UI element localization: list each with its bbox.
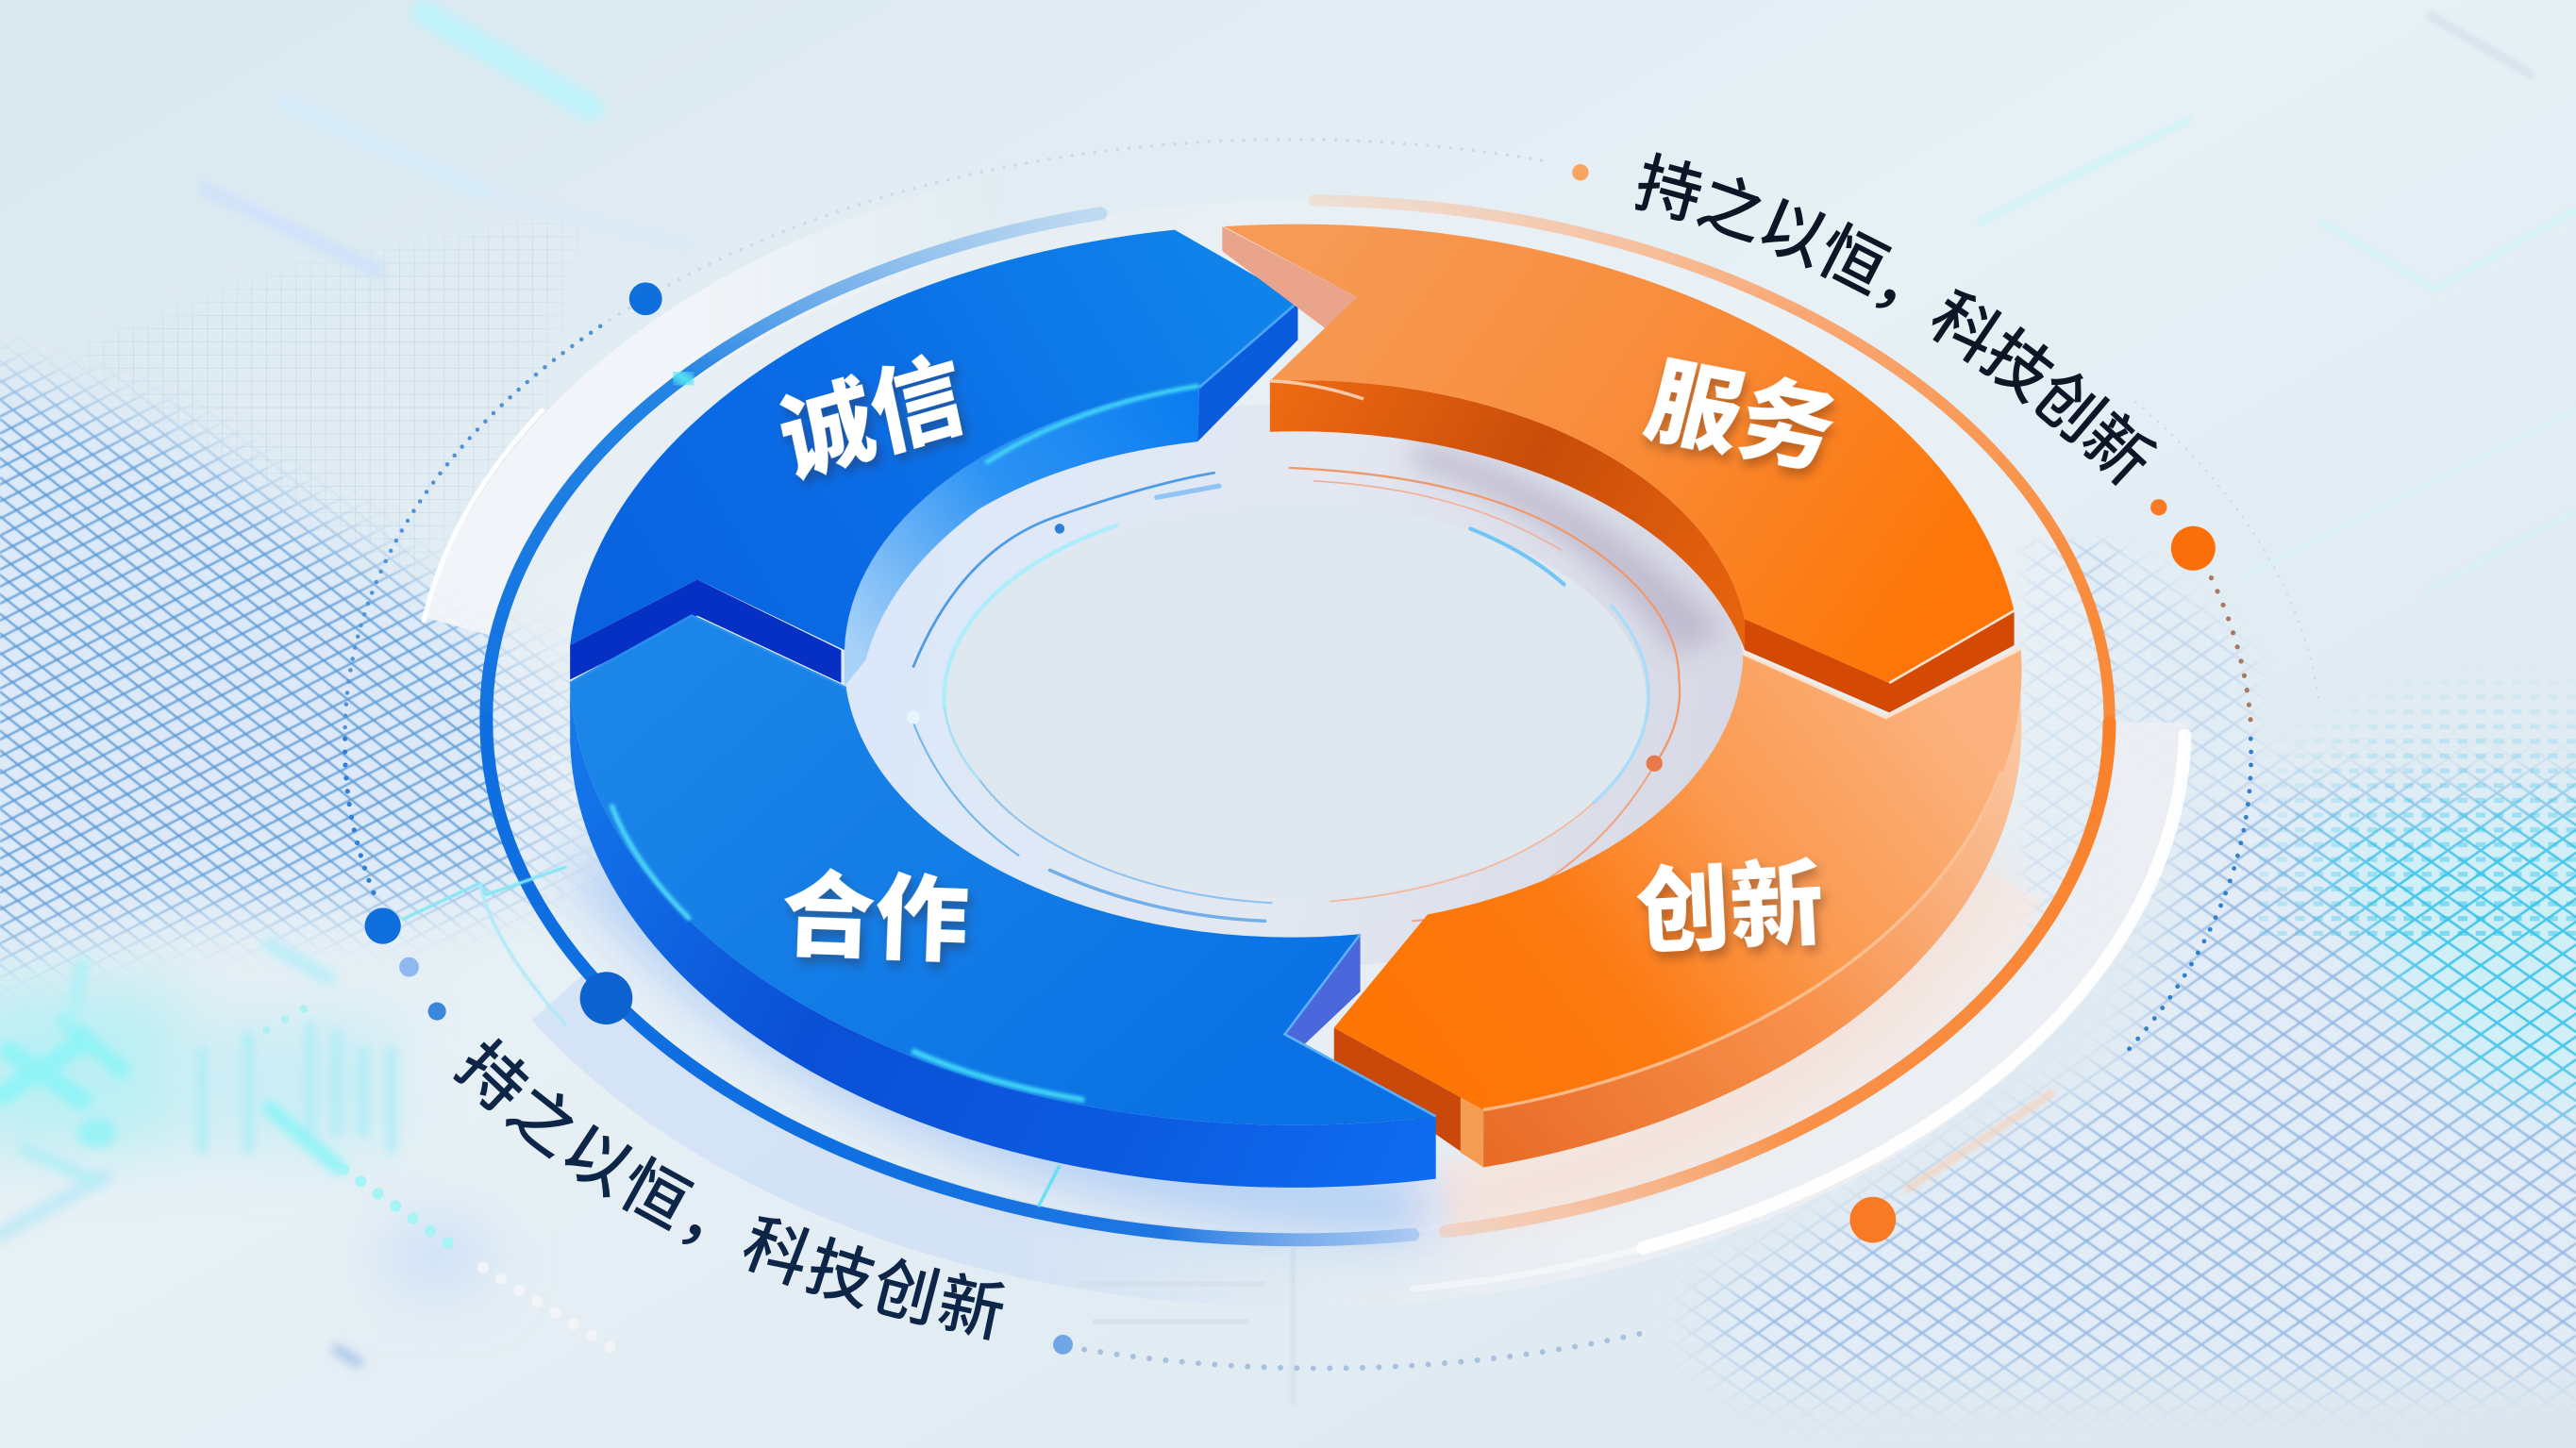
accent dots: orange — [1572, 164, 2216, 1242]
dotted tail — [248, 1005, 614, 1350]
outer dotted orbit — [345, 140, 2319, 1368]
accent dots: blue — [365, 282, 1073, 1355]
tagline: upper right: 持之以恒，科技创新 — [1634, 152, 2157, 487]
label: 服务: 服务 — [1636, 349, 1846, 486]
segment: 创新 — [1334, 648, 2021, 1167]
inner well floor — [840, 404, 1747, 969]
label: 创新: 创新 — [1633, 852, 1826, 966]
inner dots — [907, 524, 1663, 772]
segment: 服务 — [1222, 225, 2015, 712]
well shadow — [1413, 440, 1725, 657]
segment: 诚信 — [570, 230, 1297, 686]
orange outer ring — [1314, 200, 2110, 1231]
blue outer ring — [486, 213, 1413, 1240]
label: 合作: 合作 — [779, 863, 971, 974]
inner ring wash — [486, 200, 2110, 1238]
glass band — [424, 208, 2185, 1322]
cyan accent lines — [403, 867, 1060, 1207]
segment: 合作 — [570, 616, 1436, 1188]
centre disc — [943, 504, 1647, 898]
tagline: lower left: 持之以恒，科技创新 — [453, 1038, 1006, 1340]
inner tech arcs — [912, 468, 1680, 921]
label: 诚信: 诚信 — [772, 341, 973, 496]
floor glow — [592, 854, 1988, 1207]
